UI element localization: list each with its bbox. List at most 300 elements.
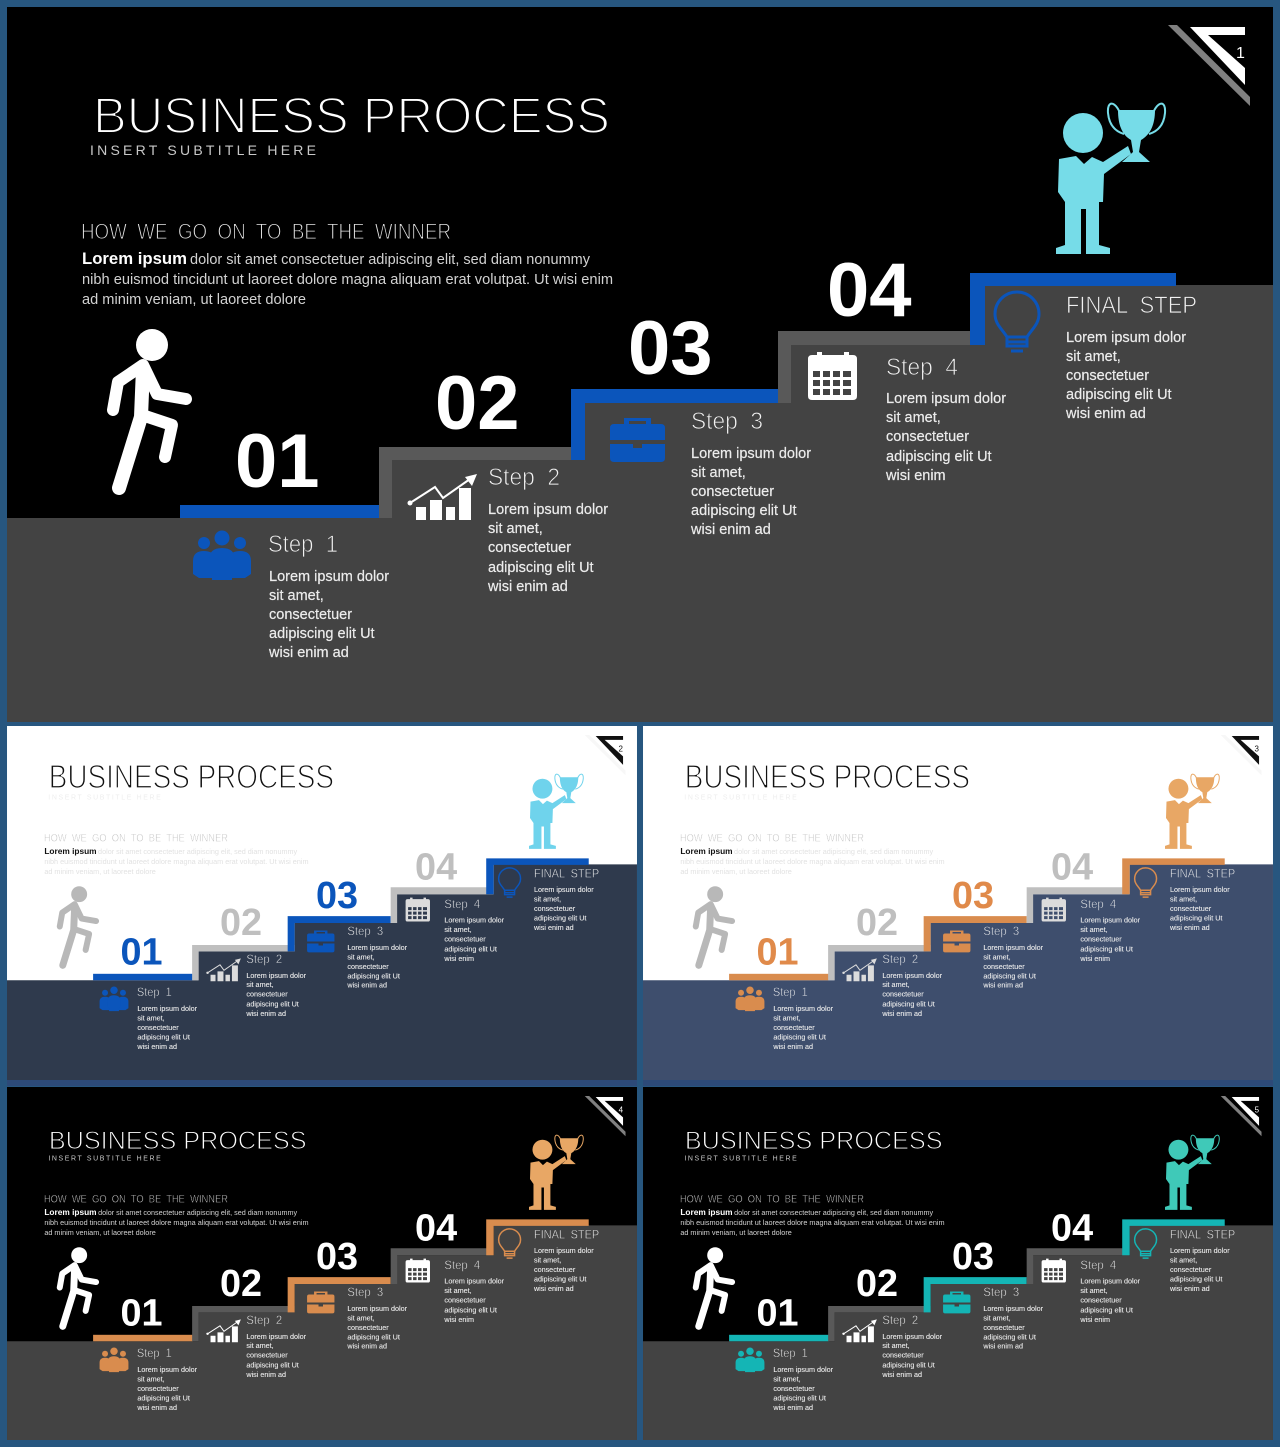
step 3 text: sit amet, — [347, 1313, 375, 1322]
final step heading: FINAL STEP — [534, 1227, 599, 1241]
step 3 riser — [288, 916, 391, 951]
intro paragraph: Lorem ipsum — [680, 846, 733, 856]
final step text: adipiscing elit Ut — [534, 914, 586, 923]
staircase panel — [7, 864, 637, 1086]
final step heading: FINAL STEP — [534, 866, 599, 880]
step 4 riser — [778, 331, 984, 403]
intro paragraph — [44, 846, 309, 876]
step 1 text: adipiscing elit Ut — [269, 626, 375, 642]
step 2 riser — [828, 945, 931, 980]
step 3 text: adipiscing elit Ut — [347, 971, 400, 980]
band under slide 3 — [643, 1080, 1273, 1086]
step 1 text: consectetuer — [773, 1023, 815, 1032]
slide 5: black and teal — [643, 1087, 1273, 1440]
final step text: Lorem ipsum dolor — [534, 885, 594, 894]
step 2 text: adipiscing elit Ut — [882, 1000, 935, 1009]
icon: calendar — [808, 352, 857, 400]
step 4 text: consectetuer — [1080, 934, 1122, 943]
icon: walking person — [696, 886, 732, 965]
step 1 text: consectetuer — [137, 1384, 179, 1393]
step 1 heading: Step 1 — [773, 985, 808, 999]
final step riser — [1122, 1219, 1225, 1255]
title: BUSINESS PROCESS — [49, 759, 334, 796]
section heading: HOW WE GO ON TO BE THE WINNER — [680, 1193, 864, 1205]
final step text: Lorem ipsum dolor — [1170, 885, 1230, 894]
icon: calendar — [1042, 1259, 1066, 1283]
icon: light bulb — [499, 868, 521, 897]
step 3 text: adipiscing elit Ut — [691, 503, 797, 519]
step 1 text: adipiscing elit Ut — [137, 1032, 190, 1041]
step 1 text: sit amet, — [773, 1014, 801, 1023]
step 1 text: sit amet, — [269, 588, 324, 604]
intro paragraph: nibh euismod tincidunt ut laoreet dolore magna aliquam erat volutpat. Ut wisi enim — [680, 1218, 945, 1227]
intro paragraph: dolor sit amet consectetuer adipiscing elit, sed diam nonummy — [190, 252, 591, 268]
step 4 text: wisi enim — [1079, 954, 1110, 963]
step 1 text: sit amet, — [137, 1375, 165, 1384]
step 3 text: consectetuer — [983, 962, 1025, 971]
final step text: wisi enim ad — [1065, 406, 1146, 422]
step 3 text: wisi enim ad — [346, 1342, 387, 1351]
number 02: 02 — [220, 1263, 262, 1305]
staircase panel — [7, 285, 1273, 730]
number 02: 02 — [435, 361, 520, 446]
subtitle: INSERT SUBTITLE HERE — [48, 795, 161, 802]
icon: people — [193, 530, 251, 580]
icon: winner with trophy — [1165, 774, 1219, 849]
corner logo — [1221, 1096, 1262, 1136]
final step riser — [486, 858, 589, 894]
final step text: sit amet, — [1066, 349, 1121, 365]
final step text: sit amet, — [534, 895, 561, 904]
step 4 riser — [1027, 887, 1129, 923]
icon: growth chart — [408, 474, 477, 520]
final step text: consectetuer — [1170, 904, 1212, 913]
step 3 — [924, 875, 1044, 990]
step 4 text: sit amet, — [886, 410, 941, 426]
step 1 text: Lorem ipsum dolor — [773, 1365, 834, 1374]
slide background — [643, 726, 1273, 1082]
corner logo: 3 — [1255, 744, 1260, 753]
icon: calendar — [1042, 898, 1066, 922]
intro paragraph: nibh euismod tincidunt ut laoreet dolore magna aliquam erat volutpat. Ut wisi enim — [44, 1218, 309, 1227]
step 1 heading: Step 1 — [268, 531, 338, 558]
final step text: adipiscing elit Ut — [1170, 914, 1222, 923]
number 02: 02 — [856, 1263, 898, 1305]
step 1 text: wisi enim ad — [136, 1042, 177, 1051]
step 2 heading: Step 2 — [488, 464, 560, 491]
step 2 riser — [192, 1306, 295, 1341]
step 3 text: Lorem ipsum dolor — [347, 1304, 408, 1313]
step 4 text: consectetuer — [1080, 1295, 1122, 1304]
icon: briefcase — [307, 931, 334, 952]
step 1 — [729, 931, 834, 1051]
step 2 text: consectetuer — [882, 1351, 924, 1360]
number 02: 02 — [856, 902, 898, 944]
number 03: 03 — [316, 1236, 358, 1278]
step 1 text: consectetuer — [137, 1023, 179, 1032]
corner logo: 1 — [1236, 45, 1245, 62]
step 4 text: adipiscing elit Ut — [444, 1305, 497, 1314]
final step text: adipiscing elit Ut — [1066, 387, 1172, 403]
final step text: wisi enim ad — [1169, 923, 1210, 932]
step 1 text: Lorem ipsum dolor — [137, 1365, 198, 1374]
staircase panel — [7, 1225, 637, 1447]
step 4 text: wisi enim — [1079, 1315, 1110, 1324]
slide 4: black and orange — [7, 1087, 637, 1440]
step 3 riser — [288, 1277, 391, 1312]
step 2 text: Lorem ipsum dolor — [488, 502, 608, 518]
icon: people — [100, 986, 128, 1011]
step 4 — [1027, 1207, 1141, 1324]
step 3 text: Lorem ipsum dolor — [691, 446, 811, 462]
icon: briefcase — [307, 1292, 334, 1313]
number 03: 03 — [952, 875, 994, 917]
step 2 text: adipiscing elit Ut — [488, 560, 594, 576]
step 4 text: Lorem ipsum dolor — [886, 391, 1006, 407]
icon: growth chart — [206, 958, 241, 981]
step 4 — [778, 248, 1006, 484]
final step heading: FINAL STEP — [1170, 866, 1235, 880]
final step heading: FINAL STEP — [1066, 292, 1197, 319]
step 2 heading: Step 2 — [246, 1313, 283, 1327]
final step text: consectetuer — [1170, 1265, 1212, 1274]
step 4 heading: Step 4 — [886, 354, 958, 381]
final step heading: FINAL STEP — [1170, 1227, 1235, 1241]
final step text: sit amet, — [534, 1256, 561, 1265]
icon: growth chart — [206, 1319, 241, 1342]
step 2 text: adipiscing elit Ut — [246, 1361, 299, 1370]
step 3 text: sit amet, — [347, 952, 375, 961]
intro paragraph: dolor sit amet consectetuer adipiscing elit, sed diam nonummy — [734, 1208, 934, 1217]
step 1 bar — [93, 1335, 193, 1341]
intro paragraph: ad minim veniam, ut laoreet dolore — [680, 867, 792, 876]
intro paragraph: ad minim veniam, ut laoreet dolore — [680, 1228, 792, 1237]
step 4 heading: Step 4 — [1080, 897, 1117, 911]
step 4 text: wisi enim — [443, 954, 474, 963]
intro paragraph: dolor sit amet consectetuer adipiscing elit, sed diam nonummy — [98, 1208, 298, 1217]
icon: light bulb — [499, 1229, 521, 1258]
step 4 text: adipiscing elit Ut — [444, 944, 497, 953]
step 3 heading: Step 3 — [983, 924, 1020, 938]
step 2 text: consectetuer — [246, 990, 288, 999]
step 2 — [828, 902, 943, 1018]
number 04: 04 — [415, 1207, 457, 1249]
step 2 text: wisi enim ad — [245, 1009, 286, 1018]
step 4 text: adipiscing elit Ut — [886, 449, 992, 465]
intro paragraph: ad minim veniam, ut laoreet dolore — [44, 867, 156, 876]
step 4 heading: Step 4 — [444, 897, 481, 911]
step 3 — [924, 1236, 1044, 1351]
intro paragraph — [82, 249, 613, 308]
step 3 text: Lorem ipsum dolor — [983, 943, 1044, 952]
step 4 text: consectetuer — [886, 429, 969, 445]
step 3 text: sit amet, — [983, 952, 1011, 961]
intro paragraph: dolor sit amet consectetuer adipiscing elit, sed diam nonummy — [98, 847, 298, 856]
title: BUSINESS PROCESS — [685, 1127, 943, 1155]
step 3 text: consectetuer — [347, 1323, 389, 1332]
step 3 text: adipiscing elit Ut — [983, 1332, 1036, 1341]
step 4 — [391, 846, 505, 963]
step 2 text: sit amet, — [488, 521, 543, 537]
final step text: adipiscing elit Ut — [534, 1275, 586, 1284]
step 3 — [288, 875, 408, 990]
step 1 bar — [729, 1335, 829, 1341]
intro paragraph: ad minim veniam, ut laoreet dolore — [82, 292, 306, 308]
step 3 heading: Step 3 — [347, 1285, 384, 1299]
step 2 text: sit amet, — [246, 1341, 274, 1350]
intro paragraph: ad minim veniam, ut laoreet dolore — [44, 1228, 156, 1237]
step 2 text: sit amet, — [246, 980, 274, 989]
corner logo — [1168, 25, 1250, 106]
final step text: adipiscing elit Ut — [1170, 1275, 1222, 1284]
final step text: wisi enim ad — [533, 1284, 574, 1293]
slide background — [7, 7, 1273, 722]
intro paragraph: dolor sit amet consectetuer adipiscing elit, sed diam nonummy — [734, 847, 934, 856]
slide background — [7, 726, 637, 1082]
step 3 text: consectetuer — [347, 962, 389, 971]
number 01: 01 — [120, 931, 163, 973]
step 1 text: consectetuer — [269, 607, 352, 623]
section heading: HOW WE GO ON TO BE THE WINNER — [81, 219, 451, 244]
band under slide 2 — [7, 1080, 637, 1086]
step 4 text: wisi enim — [443, 1315, 474, 1324]
step 2 text: wisi enim ad — [881, 1009, 922, 1018]
step 3 text: wisi enim ad — [690, 522, 771, 538]
step 1 text: wisi enim ad — [772, 1403, 813, 1412]
step 1 bar — [729, 974, 829, 980]
title: BUSINESS PROCESS — [93, 87, 610, 144]
step 4 text: Lorem ipsum dolor — [444, 1277, 505, 1286]
step 1 text: Lorem ipsum dolor — [137, 1004, 198, 1013]
step 2 text: Lorem ipsum dolor — [882, 971, 943, 980]
number 01: 01 — [235, 419, 320, 504]
number 01: 01 — [756, 931, 799, 973]
step 4 text: Lorem ipsum dolor — [444, 916, 505, 925]
step 1 text: consectetuer — [773, 1384, 815, 1393]
step 4 riser — [391, 887, 493, 923]
final step — [486, 858, 599, 932]
step 2 text: Lorem ipsum dolor — [246, 971, 307, 980]
step 4 riser — [391, 1248, 493, 1284]
subtitle: INSERT SUBTITLE HERE — [48, 1156, 161, 1163]
step 1 text: adipiscing elit Ut — [137, 1393, 190, 1402]
step 4 text: sit amet, — [1080, 1286, 1108, 1295]
step 1 heading: Step 1 — [773, 1346, 808, 1360]
step 1 text: adipiscing elit Ut — [773, 1032, 826, 1041]
step 1 text: wisi enim ad — [136, 1403, 177, 1412]
step 1 text: sit amet, — [137, 1014, 165, 1023]
step 3 riser — [571, 389, 778, 460]
step 2 text: sit amet, — [882, 980, 910, 989]
step 2 — [379, 361, 608, 595]
step 4 text: Lorem ipsum dolor — [1080, 916, 1141, 925]
icon: walking person — [60, 886, 96, 965]
final step text: consectetuer — [534, 1265, 576, 1274]
section heading: HOW WE GO ON TO BE THE WINNER — [44, 1193, 228, 1205]
icon: light bulb — [995, 292, 1039, 351]
step 2 riser — [192, 945, 295, 980]
number 04: 04 — [1051, 846, 1093, 888]
intro paragraph — [680, 1207, 945, 1237]
intro paragraph: nibh euismod tincidunt ut laoreet dolore magna aliquam erat volutpat. Ut wisi enim — [82, 272, 613, 288]
final step text: sit amet, — [1170, 1256, 1197, 1265]
step 4 heading: Step 4 — [1080, 1258, 1117, 1272]
step 2 heading: Step 2 — [246, 952, 283, 966]
step 3 heading: Step 3 — [347, 924, 384, 938]
step 4 text: sit amet, — [1080, 925, 1108, 934]
slide 1: large black and blue — [7, 7, 1273, 722]
step 2 text: consectetuer — [246, 1351, 288, 1360]
step 1 — [93, 1292, 198, 1412]
number 03: 03 — [316, 875, 358, 917]
step 1 heading: Step 1 — [137, 1346, 172, 1360]
staircase panel — [643, 864, 1273, 1086]
number 03: 03 — [628, 306, 713, 391]
step 4 text: adipiscing elit Ut — [1080, 944, 1133, 953]
step 4 text: adipiscing elit Ut — [1080, 1305, 1133, 1314]
corner logo — [585, 1096, 626, 1136]
step 3 text: wisi enim ad — [982, 1342, 1023, 1351]
icon: people — [100, 1347, 128, 1372]
slide 3: white, slate and orange — [643, 726, 1273, 1080]
step 1 bar — [93, 974, 193, 980]
step 2 text: wisi enim ad — [487, 579, 568, 595]
step 1 text: Lorem ipsum dolor — [269, 569, 389, 585]
step 2 — [192, 902, 307, 1018]
step 2 riser — [379, 447, 585, 518]
step 2 heading: Step 2 — [882, 1313, 919, 1327]
number 03: 03 — [952, 1236, 994, 1278]
step 1 — [93, 931, 198, 1051]
step 2 text: adipiscing elit Ut — [246, 1000, 299, 1009]
final step — [1122, 1219, 1235, 1293]
step 2 text: wisi enim ad — [245, 1370, 286, 1379]
icon: light bulb — [1135, 868, 1157, 897]
icon: briefcase — [610, 418, 665, 462]
final step riser — [970, 273, 1176, 345]
icon: light bulb — [1135, 1229, 1157, 1258]
icon: people — [736, 986, 764, 1011]
step 1 text: Lorem ipsum dolor — [773, 1004, 834, 1013]
intro paragraph: nibh euismod tincidunt ut laoreet dolore magna aliquam erat volutpat. Ut wisi enim — [44, 857, 309, 866]
section heading: HOW WE GO ON TO BE THE WINNER — [44, 832, 228, 844]
icon: briefcase — [943, 931, 970, 952]
number 04: 04 — [827, 248, 912, 333]
step 3 riser — [924, 1277, 1027, 1312]
final step — [486, 1219, 599, 1293]
icon: winner with trophy — [1056, 104, 1165, 254]
icon: growth chart — [842, 1319, 877, 1342]
step 2 — [828, 1263, 943, 1379]
final step — [970, 273, 1197, 422]
intro paragraph: Lorem ipsum — [680, 1207, 733, 1217]
corner logo: 4 — [619, 1105, 624, 1114]
step 4 text: wisi enim — [885, 468, 946, 484]
step 1 — [729, 1292, 834, 1412]
final step text: wisi enim ad — [533, 923, 574, 932]
corner logo: 2 — [619, 744, 624, 753]
slide background — [643, 1087, 1273, 1443]
step 3 text: sit amet, — [983, 1313, 1011, 1322]
icon: growth chart — [842, 958, 877, 981]
step 4 — [1027, 846, 1141, 963]
step 2 text: Lorem ipsum dolor — [882, 1332, 943, 1341]
icon: walking person — [60, 1247, 96, 1326]
step 4 text: consectetuer — [444, 934, 486, 943]
step 2 heading: Step 2 — [882, 952, 919, 966]
step 1 text: wisi enim ad — [772, 1042, 813, 1051]
number 04: 04 — [1051, 1207, 1093, 1249]
step 4 — [391, 1207, 505, 1324]
final step riser — [1122, 858, 1225, 894]
corner logo — [585, 735, 626, 775]
final step — [1122, 858, 1235, 932]
step 1 text: sit amet, — [773, 1375, 801, 1384]
number 02: 02 — [220, 902, 262, 944]
final step text: wisi enim ad — [1169, 1284, 1210, 1293]
step 3 heading: Step 3 — [691, 408, 763, 435]
section heading: HOW WE GO ON TO BE THE WINNER — [680, 832, 864, 844]
intro paragraph: Lorem ipsum — [44, 846, 97, 856]
number 01: 01 — [756, 1292, 799, 1334]
step 1 bar — [180, 505, 380, 518]
corner logo — [1221, 735, 1262, 775]
icon: walking person — [113, 329, 186, 488]
title: BUSINESS PROCESS — [685, 759, 970, 796]
step 3 text: consectetuer — [983, 1323, 1025, 1332]
number 04: 04 — [415, 846, 457, 888]
step 4 heading: Step 4 — [444, 1258, 481, 1272]
step 2 text: sit amet, — [882, 1341, 910, 1350]
step 3 text: consectetuer — [691, 484, 774, 500]
final step text: consectetuer — [534, 904, 576, 913]
step 3 text: sit amet, — [691, 465, 746, 481]
subtitle: INSERT SUBTITLE HERE — [684, 1156, 797, 1163]
step 4 text: consectetuer — [444, 1295, 486, 1304]
step 4 text: sit amet, — [444, 1286, 472, 1295]
step 2 text: wisi enim ad — [881, 1370, 922, 1379]
icon: calendar — [406, 898, 430, 922]
step 2 riser — [828, 1306, 931, 1341]
step 2 text: consectetuer — [882, 990, 924, 999]
step 2 text: consectetuer — [488, 540, 571, 556]
step 3 heading: Step 3 — [983, 1285, 1020, 1299]
step 4 text: Lorem ipsum dolor — [1080, 1277, 1141, 1286]
step 2 — [192, 1263, 307, 1379]
step 2 text: Lorem ipsum dolor — [246, 1332, 307, 1341]
final step text: Lorem ipsum dolor — [534, 1246, 594, 1255]
icon: winner with trophy — [529, 1135, 583, 1210]
icon: calendar — [406, 1259, 430, 1283]
step 1 text: wisi enim ad — [268, 645, 349, 661]
step 2 text: adipiscing elit Ut — [882, 1361, 935, 1370]
intro paragraph — [680, 846, 945, 876]
step 3 — [571, 306, 811, 538]
step 1 — [180, 419, 389, 661]
icon: winner with trophy — [1165, 1135, 1219, 1210]
step 3 text: Lorem ipsum dolor — [347, 943, 408, 952]
staircase panel — [643, 1225, 1273, 1447]
final step text: Lorem ipsum dolor — [1066, 330, 1186, 346]
intro paragraph: nibh euismod tincidunt ut laoreet dolore magna aliquam erat volutpat. Ut wisi enim — [680, 857, 945, 866]
step 4 text: sit amet, — [444, 925, 472, 934]
final step text: sit amet, — [1170, 895, 1197, 904]
step 1 heading: Step 1 — [137, 985, 172, 999]
step 3 text: wisi enim ad — [346, 981, 387, 990]
icon: walking person — [696, 1247, 732, 1326]
final step text: Lorem ipsum dolor — [1170, 1246, 1230, 1255]
step 3 — [288, 1236, 408, 1351]
